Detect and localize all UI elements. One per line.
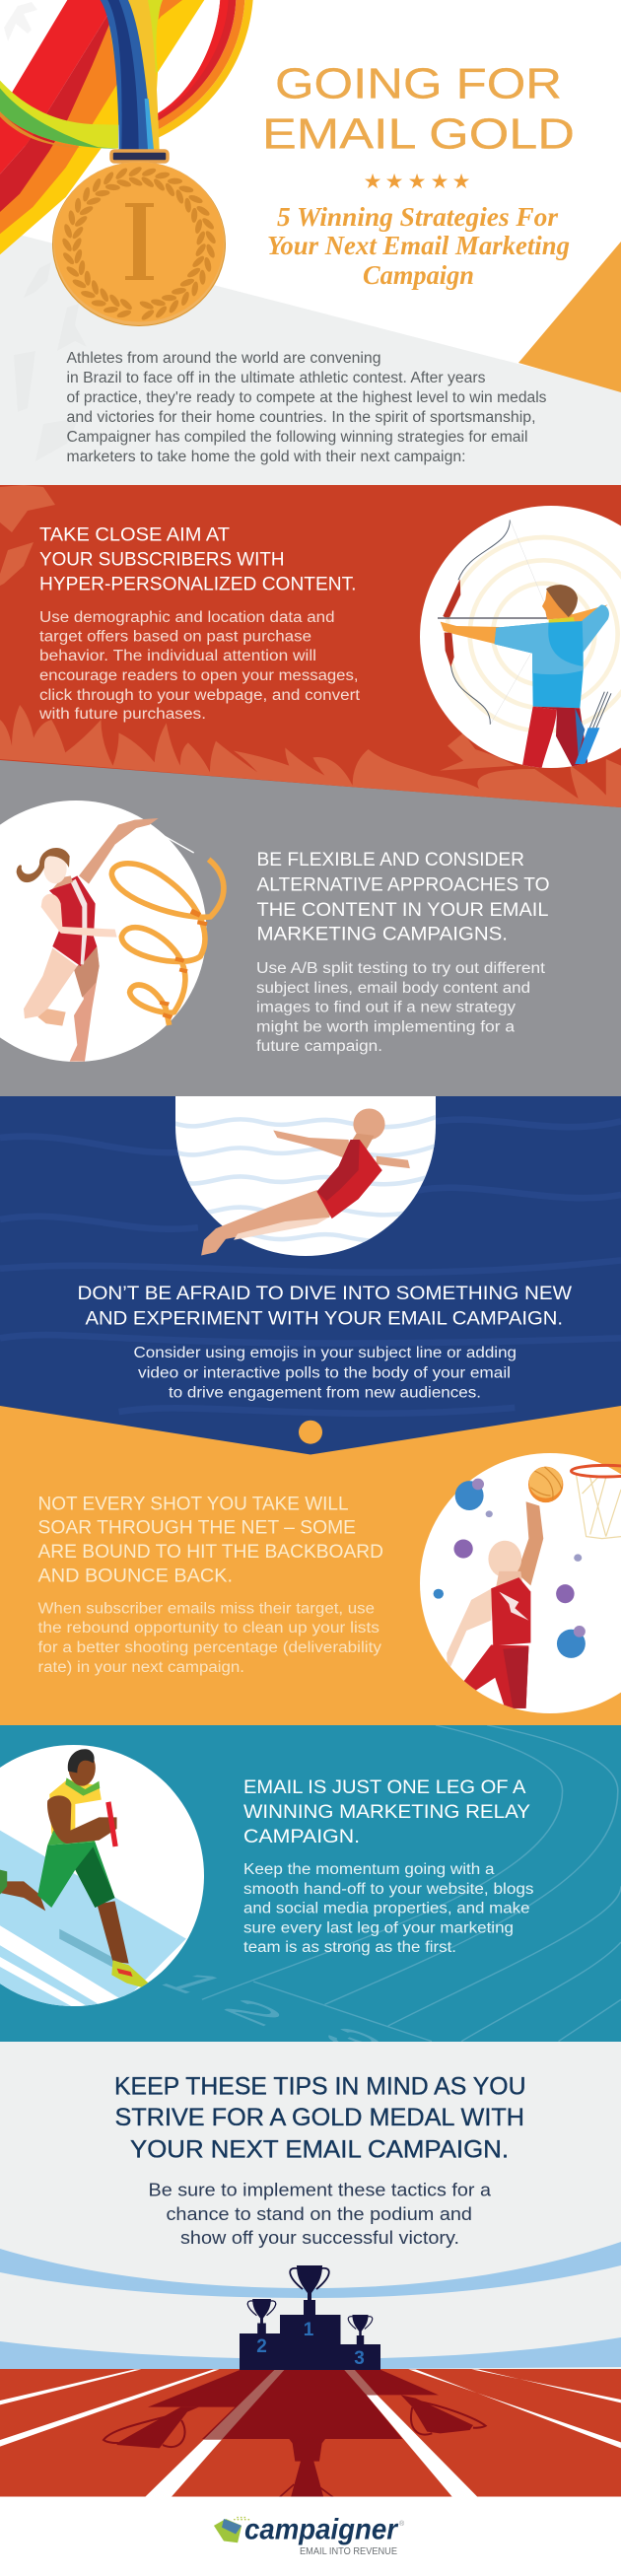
panel: basketball (orange) [0,1406,621,1725]
five stars: ★ [364,171,381,193]
body text: sure every last leg of your marketing [243,1920,514,1936]
track [0,1831,186,2006]
running track lines [202,1725,621,2042]
heading: STRIVE FOR A GOLD MEDAL WITH [114,2104,524,2131]
rainbow ribbon band [0,81,118,149]
heading: AND EXPERIMENT WITH YOUR EMAIL CAMPAIGN. [85,1307,563,1329]
body text [37,1601,381,1676]
ball [528,1467,563,1502]
head [542,589,574,619]
body text: When subscriber emails miss their target, use [37,1601,375,1617]
body text: Be sure to implement these tactics for a [148,2181,492,2200]
outer lane lines [0,2369,621,2497]
body text [256,960,546,1055]
diver circle [175,1096,436,1256]
five stars: ★ [385,171,403,193]
panel: archery (red) [0,485,621,808]
hero grey backdrop [0,230,621,485]
body text: future campaign. [256,1038,382,1055]
five stars: ★ [431,171,448,193]
logo: campaigner [214,2514,405,2557]
icon: basketball player [434,1465,621,1708]
heading [243,1776,530,1847]
body text: smooth hand-off to your website, blogs [243,1881,534,1898]
body text: might be worth implementing for a [256,1019,515,1035]
body text: the rebound opportunity to clean up your lists [37,1620,380,1636]
heading: AND BOUNCE BACK. [37,1566,233,1587]
standing leg [70,946,100,1062]
podium shadow [148,2370,439,2497]
intro text: in Brazil to face off in the ultimate athletic contest. After years [67,370,486,386]
heading [256,849,550,944]
body text: Use A/B split testing to try out different [256,960,546,977]
orange background [0,1406,621,1725]
body text: click through to your webpage, and convert [39,687,361,704]
body text [38,609,361,723]
faint athlete silhouettes [4,2,87,461]
lane lines and shadows [0,2369,621,2497]
legs [522,707,557,769]
torso [495,621,584,708]
body text: encourage readers to open your messages, [39,667,359,684]
water texture [0,1120,621,1414]
bubbles [434,1479,586,1658]
podium numbers: 3 [354,2348,365,2369]
body text: subject lines, email body content and [256,980,530,997]
heading [114,2072,526,2163]
icon: rhythmic gymnast [17,816,224,1062]
podium [240,2315,380,2370]
pale background [0,2042,621,2369]
subtitle: Campaign [363,260,474,290]
head [69,1750,96,1786]
first place trophy handle shadow [279,2484,333,2497]
ribbon [111,860,224,1025]
medal [52,151,226,326]
heading: KEEP THESE TIPS IN MIND AS YOU [114,2072,526,2100]
logo envelope icon [214,2518,249,2542]
grey background [0,754,621,1096]
icon: diver [201,1108,410,1255]
heading: CAMPAIGN. [243,1826,360,1847]
hoop and net [571,1465,621,1539]
tagline: EMAIL INTO REVENUE [300,2545,397,2557]
roman numeral one [125,203,154,280]
intro text: and victories for their home countries. In the spirit of sportsmanship, [67,409,536,426]
icon: archer [438,520,621,769]
podium numbers: 1 [304,2320,314,2340]
lane numbers: 2 [213,1992,295,2032]
lane numbers: 3 [313,2021,395,2060]
body text: behavior. The individual attention will [39,648,316,664]
arrow [438,617,547,619]
shorts [37,1842,115,1908]
body text: show off your successful victory. [180,2228,459,2248]
body text [134,1345,517,1402]
quiver [575,728,599,764]
third place trophy shadow [401,2395,486,2435]
intro text: marketers to take home the gold with their next campaign: [67,449,465,465]
heading: ARE BOUND TO HIT THE BACKBOARD [37,1541,383,1563]
extended arm [441,622,500,644]
raised arm [79,818,159,884]
podium numbers [256,2320,365,2369]
waves [174,1117,436,1241]
target rings [447,537,621,731]
lane numbers [162,1976,379,2042]
body text: Use demographic and location data and [39,609,335,626]
forward leg [97,1901,129,1964]
title: GOING FOR [275,59,562,108]
heading [77,1283,573,1329]
icon: relay runner [0,1749,186,2006]
torso [49,1779,104,1837]
panel: conclusion [0,2042,621,2497]
body text: Consider using emojis in your subject line or adding [134,1345,517,1361]
medal ribbons [0,0,253,254]
laurel wreath [60,165,218,322]
red background [0,485,621,807]
five stars: ★ [408,171,426,193]
neck and face [52,875,73,889]
intro text [67,350,547,465]
heading: THE CONTENT IN YOUR EMAIL [256,899,549,921]
leotard [49,875,97,966]
body text: and social media properties, and make [243,1901,530,1916]
panel: diving (blue) [0,1096,621,1459]
player [447,1501,543,1708]
lane numbers: 1 [145,1968,242,1998]
foliage decoration [0,485,621,808]
title [262,59,575,158]
heading: ALTERNATIVE APPROACHES TO [256,873,550,895]
body text [148,2181,492,2248]
heading: HYPER-PERSONALIZED CONTENT. [39,574,357,595]
body text [243,1861,534,1956]
title: EMAIL GOLD [262,110,575,158]
heading: TAKE CLOSE AIM AT [39,524,230,546]
heading: YOUR SUBSCRIBERS WITH [39,548,284,570]
logo wordmark: campaigner [244,2514,399,2545]
gymnast circle [0,801,207,1062]
body text: to drive engagement from new audiences. [169,1384,481,1402]
registered mark: ® [399,2520,405,2528]
arm and baton [47,1795,117,1844]
subtitle [267,202,570,290]
body text: target offers based on past purchase [39,629,311,645]
blue neck ribbon [126,0,160,150]
heading: YOUR NEXT EMAIL CAMPAIGN. [130,2135,509,2163]
intro text: Athletes from around the world are convening [67,350,380,367]
body text: with future purchases. [38,706,206,723]
five stars [364,171,470,193]
heading: BE FLEXIBLE AND CONSIDER [256,849,524,870]
back leg [0,1881,45,1911]
podium numbers: 2 [256,2336,267,2357]
heading: SOAR THROUGH THE NET – SOME [37,1516,356,1538]
second place trophy shadow [104,2407,199,2448]
medal loop [111,151,168,162]
panel: hero [0,0,621,485]
trophies [247,2265,373,2344]
heading [39,524,357,595]
body text: chance to stand on the podium and [166,2204,472,2224]
teal background [0,1725,621,2042]
heading: EMAIL IS JUST ONE LEG OF A [243,1776,526,1798]
body text: for a better shooting percentage (deliverability [37,1639,381,1656]
gold corner triangle [518,242,621,392]
body text: team is as strong as the first. [243,1939,456,1956]
heading: MARKETING CAMPAIGNS. [256,923,508,944]
heading: NOT EVERY SHOT YOU TAKE WILL [37,1493,349,1514]
stadium bands [0,2242,621,2369]
heading: WINNING MARKETING RELAY [243,1801,530,1823]
body text: images to find out if a new strategy [256,1000,516,1015]
bow [450,520,510,725]
body text: Keep the momentum going with a [243,1861,495,1878]
running track [0,2369,621,2496]
blue background [0,1096,621,1459]
archer circle [420,506,621,768]
raised thigh [24,948,77,1018]
basketball circle [420,1453,621,1713]
panel: gymnastics (grey) [0,754,621,1096]
runner circle [0,1745,204,2006]
panel: relay (teal) [0,1725,621,2060]
orange connector dot [299,1421,322,1444]
five stars: ★ [452,171,470,193]
subtitle: 5 Winning Strategies For [277,202,558,232]
heading: DON’T BE AFRAID TO DIVE INTO SOMETHING NEW [77,1283,573,1304]
heading [37,1493,383,1587]
intro text: Campaigner has compiled the following winning strategies for email [67,429,528,446]
near arm [41,894,117,938]
subtitle: Your Next Email Marketing [267,231,570,260]
body text: rate) in your next campaign. [37,1659,244,1676]
translucent lane over shadow [204,2370,284,2440]
hair [17,848,70,882]
intro text: of practice, they're ready to compete at the highest level to win medals [67,389,547,406]
body text: video or interactive polls to the body of your email [138,1364,511,1382]
